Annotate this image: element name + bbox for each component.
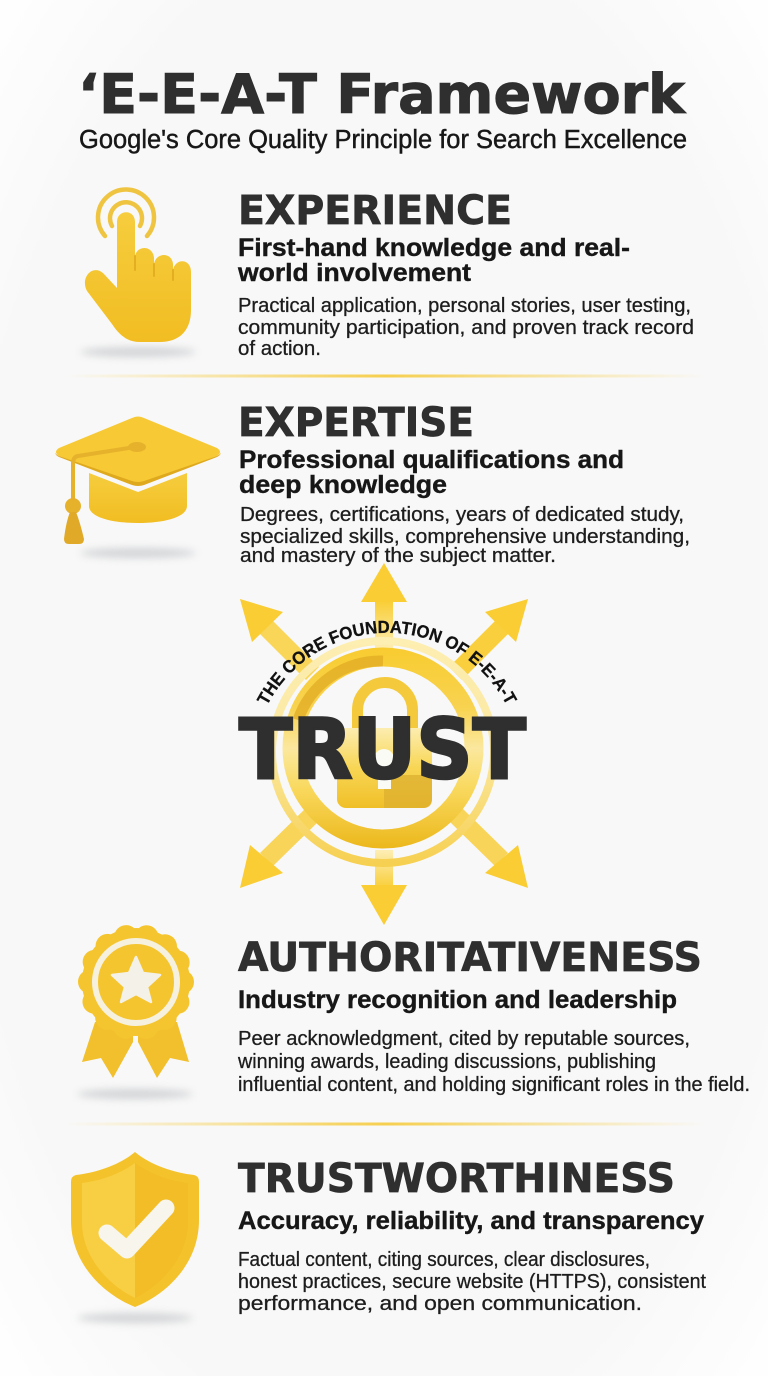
- arrows: radiating directions: [240, 563, 528, 925]
- description: trustworthiness: performance, and open communication.: [238, 1292, 642, 1315]
- description: expertise: [240, 503, 690, 567]
- description: trustworthiness: honest practices, secure website (HTTPS), consistent: [238, 1270, 706, 1293]
- icon: star: [112, 957, 160, 1002]
- heading: expertise: EXPERTISE: [238, 400, 474, 446]
- description: experience: Practical application, personal stories, user testing,: [238, 294, 691, 317]
- subheading: expertise: [239, 446, 624, 499]
- description: authoritativeness: influential content, and holding significant roles in the field.: [238, 1073, 750, 1096]
- heading: authoritativeness: AUTHORITATIVENESS: [238, 935, 702, 981]
- description: experience: [238, 294, 694, 360]
- subtitle: Google's Core Quality Principle for Search Excellence: [79, 126, 687, 154]
- heading: trustworthiness: TRUSTWORTHINESS: [238, 1156, 675, 1202]
- description: expertise: and mastery of the subject matter.: [240, 544, 556, 567]
- subheading: experience: First-hand knowledge and real-: [238, 234, 630, 262]
- description: authoritativeness: [237, 1027, 750, 1096]
- subheading: expertise: deep knowledge: [239, 471, 447, 499]
- subheading: trustworthiness: Accuracy, reliability, and transparency: [238, 1207, 704, 1235]
- subheading: expertise: Professional qualifications and: [239, 446, 624, 474]
- subheading: authoritativeness: Industry recognition and leadership: [238, 986, 677, 1014]
- subheading: experience: world involvement: [237, 259, 472, 287]
- description: authoritativeness: winning awards, leading discussions, publishing: [237, 1050, 656, 1073]
- title: ‘E-E-A-T Framework: [78, 63, 686, 126]
- trust emblem: [238, 563, 528, 925]
- icon: shield with check: [71, 1152, 199, 1323]
- description: experience: of action.: [238, 337, 321, 360]
- icon: graduation cap: [55, 416, 221, 558]
- description: trustworthiness: Factual content, citing sources, clear disclosures,: [238, 1248, 650, 1271]
- description: experience: community participation, and proven track record: [238, 316, 694, 339]
- curved label: THE CORE FOUNDATION OF E-E-A-T: [256, 620, 518, 703]
- description: expertise: Degrees, certifications, years of dedicated study,: [240, 503, 684, 526]
- icon: tapping hand: [80, 189, 196, 357]
- description: expertise: specialized skills, comprehensive understanding,: [240, 525, 690, 548]
- rings: [272, 641, 494, 863]
- panel: trustworthiness: [71, 1152, 706, 1323]
- description: authoritativeness: Peer acknowledgment, cited by reputable sources,: [238, 1027, 690, 1050]
- panel: expertise: [55, 400, 690, 567]
- heading: experience: EXPERIENCE: [238, 188, 512, 234]
- trust wordmark: TRUST: [239, 701, 526, 798]
- panel: authoritativeness: [77, 928, 750, 1099]
- description: trustworthiness: [238, 1248, 706, 1315]
- icon: padlock: [337, 682, 432, 808]
- panel: experience: [80, 188, 694, 360]
- icon: award badge: [77, 928, 193, 1099]
- subheading: experience: [237, 234, 630, 287]
